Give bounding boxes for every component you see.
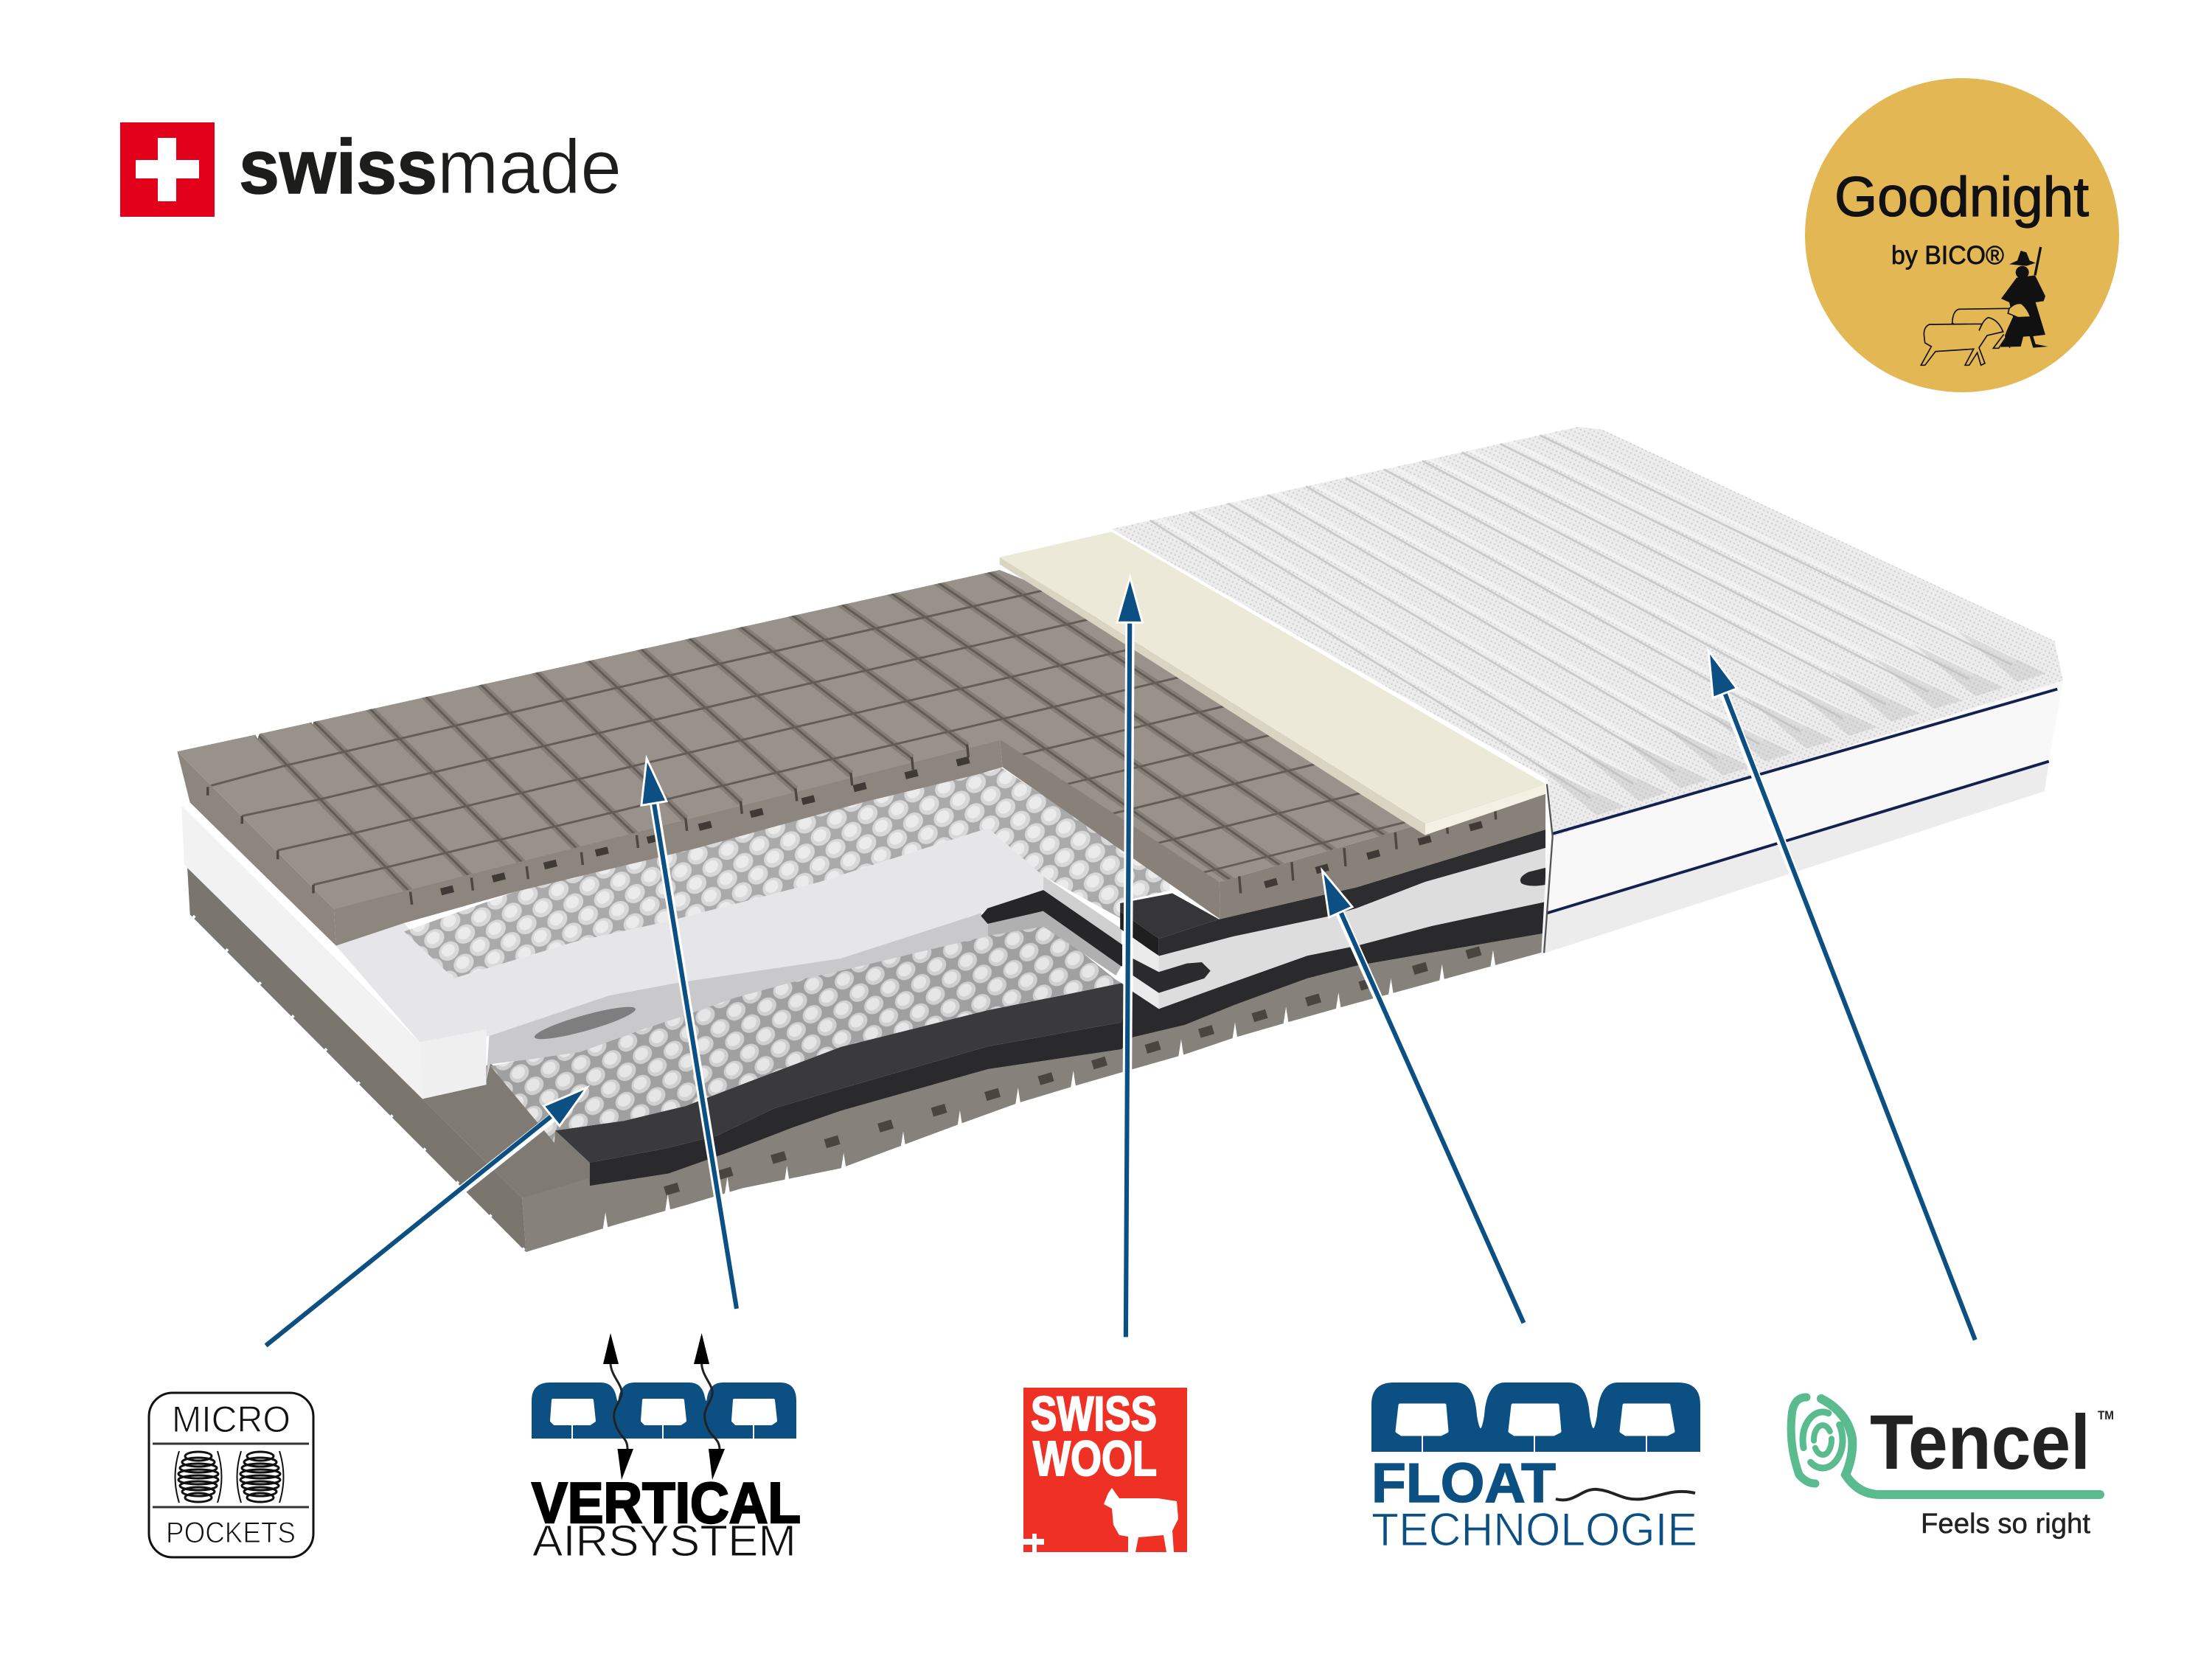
top foam layer with cube profile xyxy=(177,547,1545,946)
logo: vertical airsystem xyxy=(532,1333,801,1565)
icon: green spiral with tail xyxy=(1791,1397,2100,1495)
arrow: float technology xyxy=(1329,886,1523,1323)
quilted mattress cover xyxy=(1112,427,2063,954)
Goodnight by BICO badge xyxy=(1805,78,2119,392)
label: wool: WOOL xyxy=(1033,1431,1157,1486)
white core foam xyxy=(181,805,1121,1099)
badge title: Goodnight xyxy=(1834,166,2089,229)
wool topper strip xyxy=(1000,532,1545,835)
arrows pointing to mattress layers xyxy=(266,594,1975,1346)
icon: swiss cross xyxy=(1023,1534,1044,1552)
logo: float technologie xyxy=(1371,1382,1700,1556)
label: pockets: POCKETS xyxy=(166,1517,296,1549)
logo: tencel xyxy=(1791,1397,2114,1540)
logo: micro pockets xyxy=(149,1393,313,1557)
upper pocket springs xyxy=(404,763,1169,978)
label: technologie: TECHNOLOGIE xyxy=(1371,1504,1697,1556)
arrow: micro pockets xyxy=(266,1098,574,1346)
icon: air channels xyxy=(532,1382,796,1439)
icon: swiss flag xyxy=(120,122,215,217)
label: airsystem: AIRSYSTEM xyxy=(532,1517,796,1565)
arrow: tencel cover xyxy=(1714,667,1975,1340)
label: swiss: SWISS xyxy=(1031,1386,1157,1441)
icon: springs xyxy=(175,1451,283,1503)
label: vertical: VERTICAL xyxy=(532,1470,801,1535)
bottom foam layer xyxy=(187,865,1545,1255)
mattress cutaway illustration xyxy=(177,427,2063,1255)
brand wordmark: tencel: Tencel xyxy=(1870,1399,2090,1486)
badge subtitle: by BICO® xyxy=(1891,241,2004,270)
icon: airflow arrows xyxy=(603,1333,725,1480)
tagline: Feels so right xyxy=(1921,1509,2090,1540)
icon: wave xyxy=(1556,1489,1695,1500)
label: float: FLOAT xyxy=(1371,1452,1556,1514)
lower pocket springs xyxy=(490,922,1121,1143)
arrow: vertical airsystem xyxy=(650,775,737,1309)
brand wordmark: swissmade: swiss xyxy=(239,125,437,210)
label: micro: MICRO xyxy=(172,1399,291,1440)
logo: swiss wool xyxy=(1023,1386,1187,1552)
icon: float channels xyxy=(1371,1382,1700,1452)
arrow: swiss wool xyxy=(1126,594,1130,1337)
upper dark layer and right core section xyxy=(1120,830,1545,1009)
swissmade logo xyxy=(120,122,622,217)
icon: white sheep xyxy=(1104,1488,1178,1552)
icon: shepherd with sheep xyxy=(1921,247,2048,365)
brand wordmark: swissmade: made xyxy=(437,125,622,210)
lower dark foam layer xyxy=(555,902,1545,1186)
trademark: TM xyxy=(2098,1408,2114,1422)
